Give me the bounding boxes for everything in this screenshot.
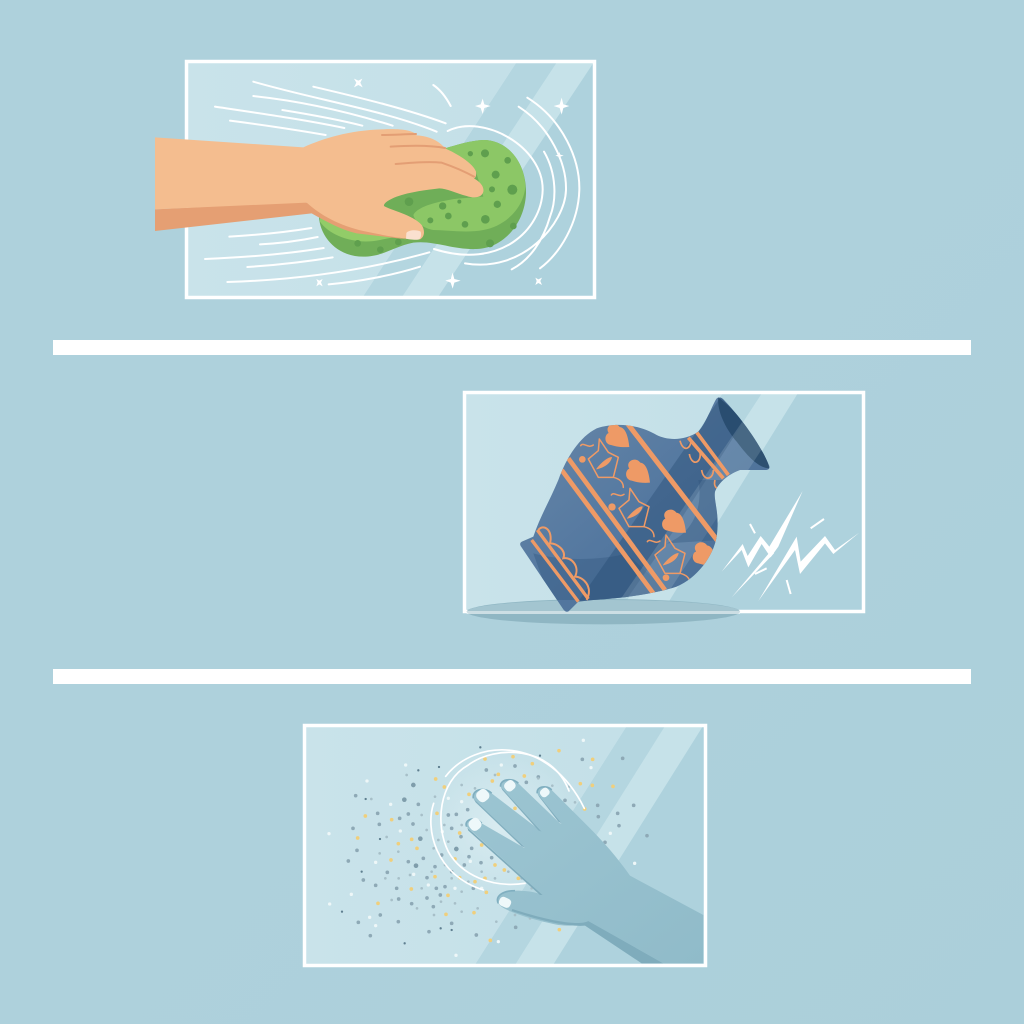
glass pane 2	[464, 392, 864, 612]
panel: hand smudging dust on glass	[304, 726, 706, 966]
panel: vase falling near glass	[464, 392, 864, 624]
swirl lines	[431, 750, 584, 890]
icon: tipped ornamental vase	[520, 398, 770, 612]
panel: wiping glass with sponge	[155, 62, 595, 298]
icon: hand holding sponge	[155, 129, 483, 240]
glass pane 1	[186, 62, 594, 298]
divider: upper	[53, 340, 971, 355]
vase shadow	[467, 599, 740, 624]
icon: crack lightning marks	[722, 491, 859, 601]
divider: lower	[53, 669, 971, 684]
icon: green sponge	[319, 140, 526, 257]
dust particles	[329, 740, 647, 955]
icon: translucent blue hand	[466, 778, 703, 963]
glass pane 3	[304, 726, 706, 966]
motion lines and sparkles	[205, 79, 579, 289]
